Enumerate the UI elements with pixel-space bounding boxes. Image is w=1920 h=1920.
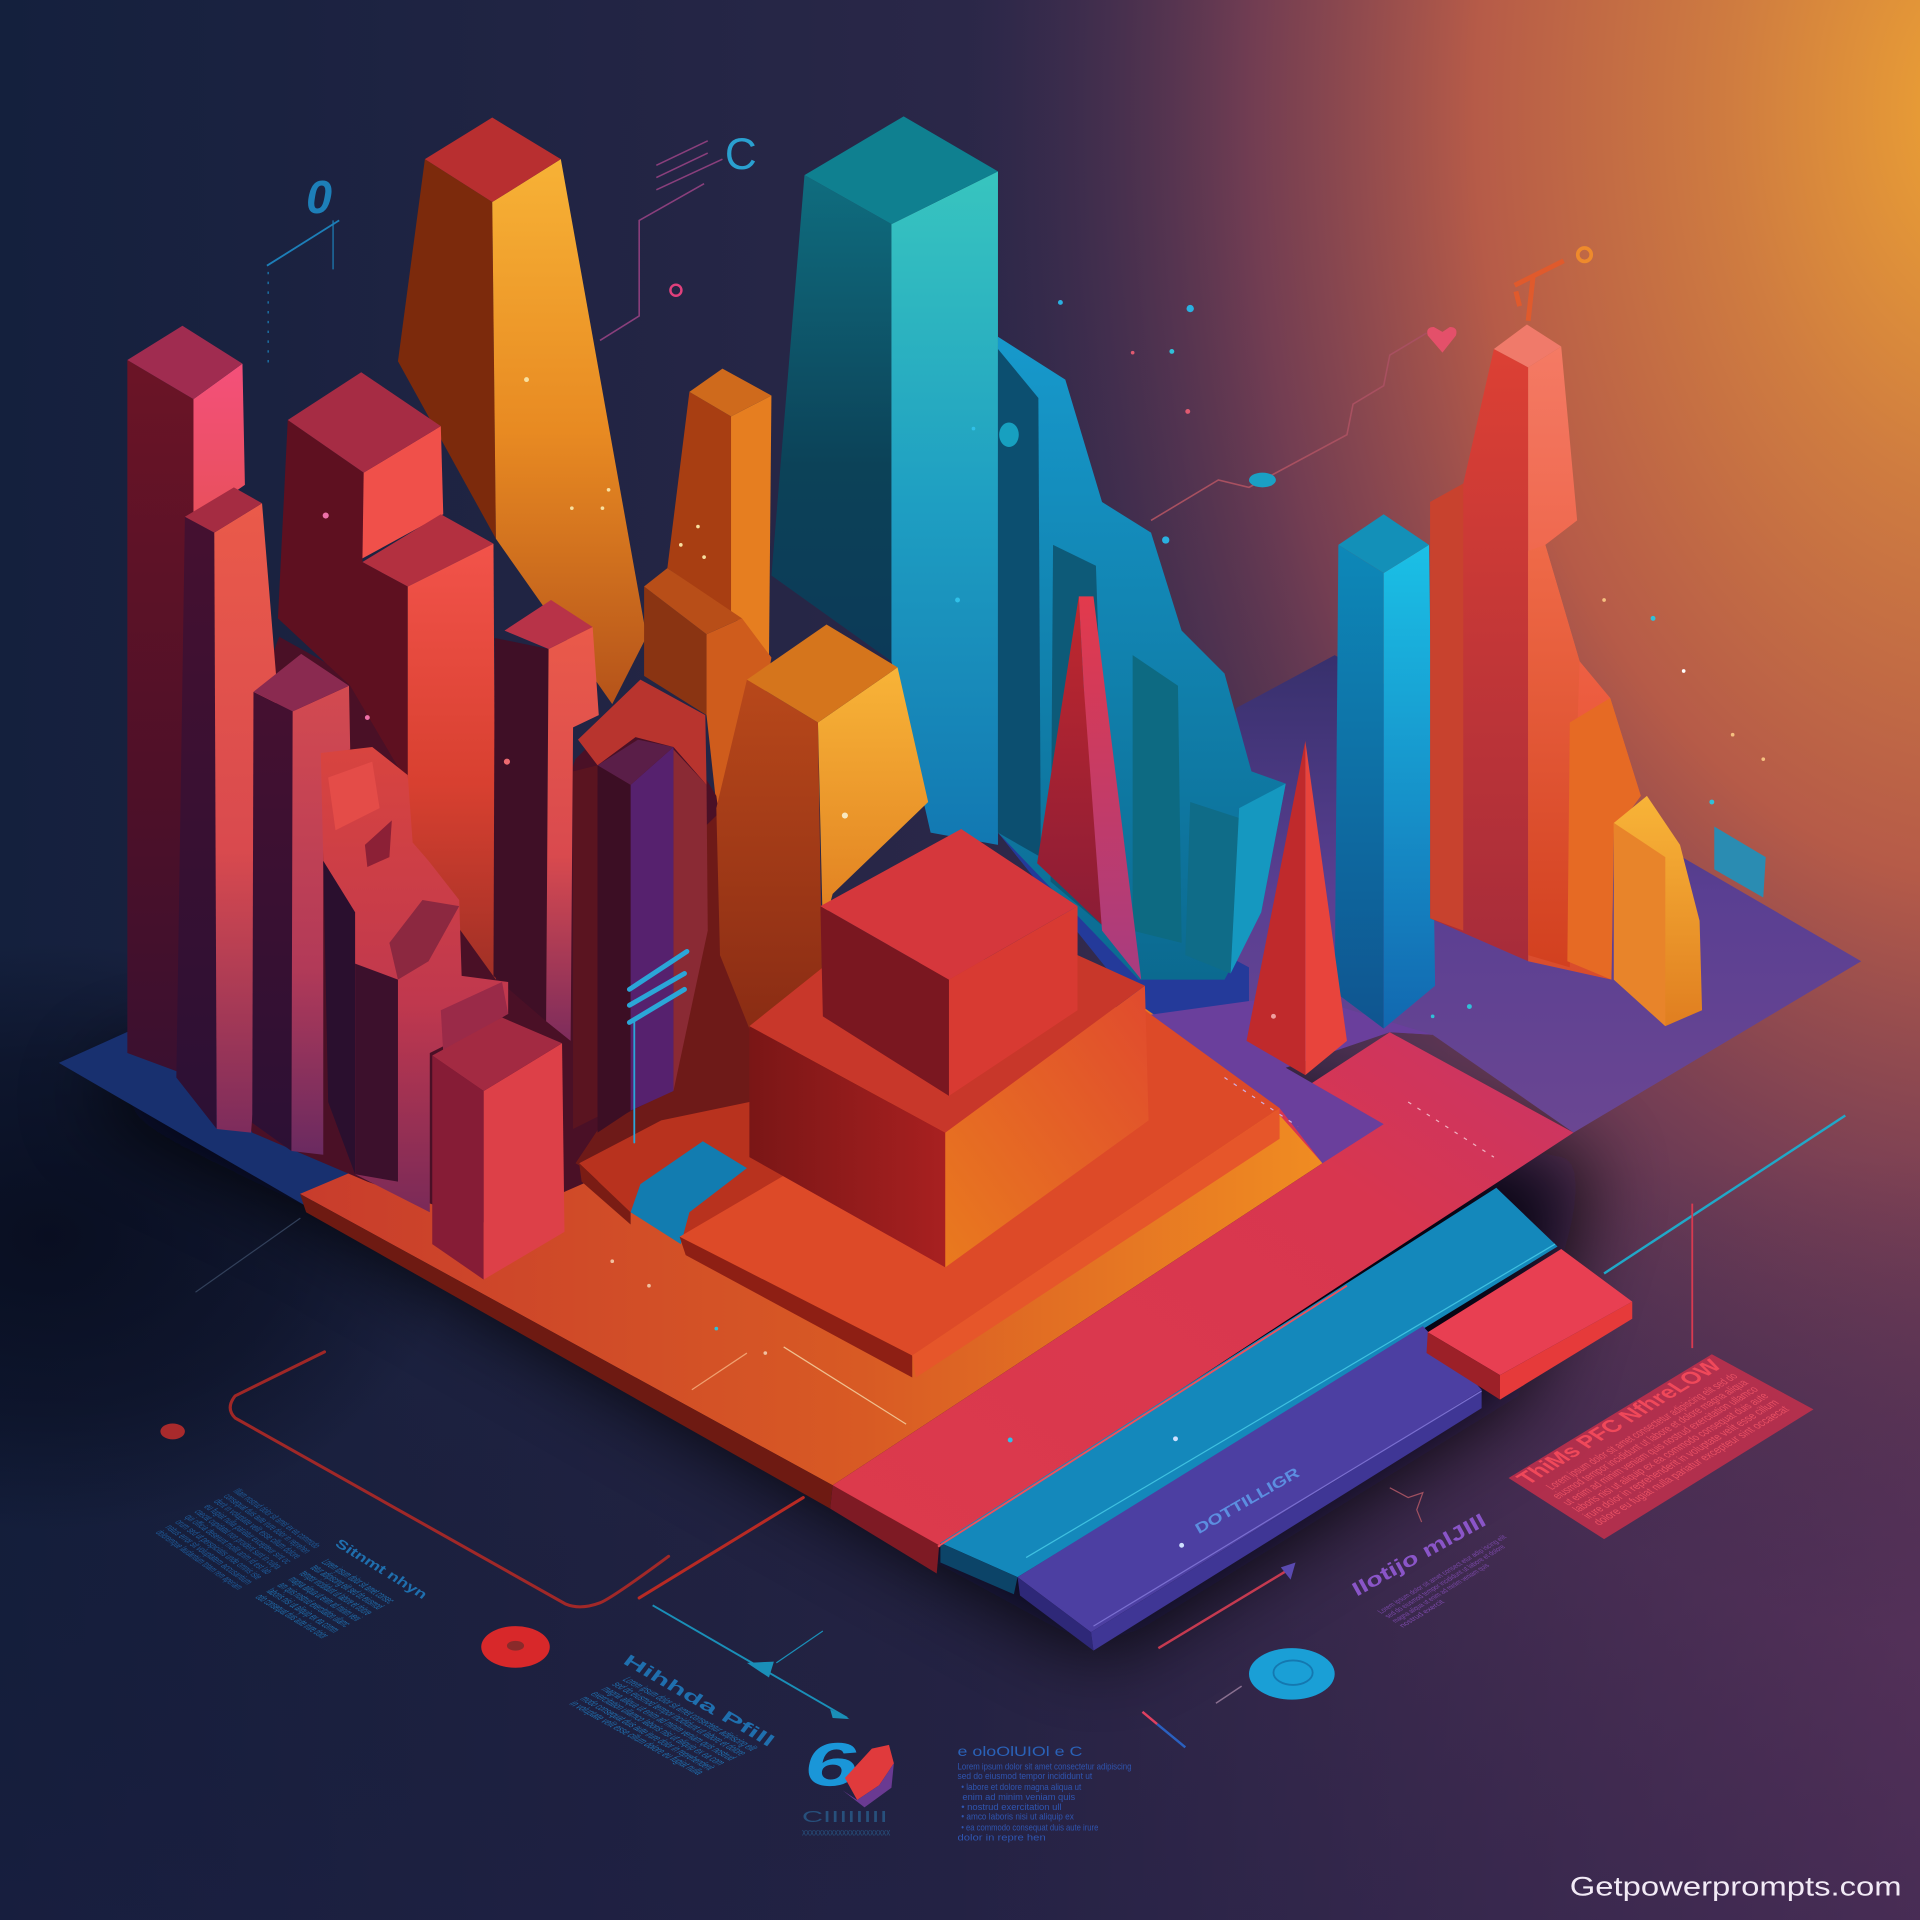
text panel: red: dolore eu fugiat nulla pariatur excepteur sint occaecat xyxy=(1590,1404,1793,1527)
text block: lower left two: Lorem ipsum dolor sit amet consec xyxy=(318,1557,398,1605)
floor: deep blue patch xyxy=(998,833,1249,1043)
text block: lower left one: derit in voluptate velit esse cillum dolore xyxy=(211,1498,304,1560)
wide red tower upper xyxy=(278,372,496,980)
cone pink xyxy=(1037,596,1141,980)
band: blue xyxy=(940,1188,1558,1594)
small orange tower xyxy=(644,369,771,804)
lower plinth red xyxy=(579,1102,857,1237)
purple tower xyxy=(573,680,708,1133)
backdrop mass of dark crimson behind left towers xyxy=(196,637,749,1224)
cone red xyxy=(1247,741,1347,1075)
logo icon: CIIIIIIII xyxy=(802,1809,888,1826)
text: odo consequat duis aute irure dolor xyxy=(252,1593,332,1640)
text list: bullets: • ea commodo consequat duis aute irure xyxy=(961,1823,1098,1833)
annotation: heart with line xyxy=(999,327,1456,520)
text panel: red xyxy=(1509,1354,1813,1539)
top cube xyxy=(820,829,1078,1096)
text panel: red: Lorem ipsum dolor sit amet consectetur adipiscing elit sed do xyxy=(1543,1371,1741,1492)
annotation: circuit lines and letter C: C xyxy=(725,130,757,179)
text block: lower left one xyxy=(152,1487,323,1592)
text list: bullets: e oloOlUIOl e C xyxy=(958,1744,1083,1759)
text block: lower left one: orum sed ut perspiciatis unde omnis iste xyxy=(172,1518,265,1581)
text list: bullets: sed do eiusmod tempor incididunt ut xyxy=(958,1771,1093,1781)
text block: lower left one: natus error sit voluptatem accusantium xyxy=(162,1523,255,1586)
text block: lower left one: qui officia deserunt mollit anim id est lab xyxy=(182,1513,274,1576)
logo icon: xxxxxxxxxxxxxxxxxxxxxx xyxy=(802,1828,890,1839)
stepped red pyramid chart xyxy=(680,829,1280,1378)
red arrow xyxy=(1158,1562,1296,1648)
orange central tower xyxy=(716,624,928,1029)
text panel: red: laboris nisi ut aliquip ex ea commodo consequat duis aute xyxy=(1569,1391,1772,1514)
stepped blue chart mass xyxy=(998,337,1286,980)
text block: centre bottom: Hihhda Pfill xyxy=(619,1652,778,1751)
text list: bullets: Lorem ipsum dolor sit amet consectetur adipiscing xyxy=(958,1761,1131,1771)
chart floor bands xyxy=(300,994,1573,1651)
floor: purple back panel xyxy=(1139,655,1861,1133)
text block: centre bottom: modo consequat duis aute irure dolor in reprehenderit xyxy=(576,1695,717,1772)
logo icon xyxy=(800,1731,894,1839)
tower at left centre xyxy=(252,654,350,1155)
text panel: red: ut enim ad minim veniam quis nostrud exercitation ullamco xyxy=(1559,1384,1762,1508)
blue column xyxy=(1335,514,1435,1029)
text list: bullets: • amco laboris nisi ut aliquip ex xyxy=(961,1812,1074,1822)
text block: purple: IIotijo mlJIII xyxy=(1348,1509,1490,1601)
logo icon: 6 xyxy=(800,1731,866,1799)
annotation: circuit lines and letter C xyxy=(600,130,757,340)
text block: centre bottom xyxy=(566,1652,778,1777)
text panel: red: irure dolor in reprehenderit in voluptate velit esse cillum xyxy=(1580,1397,1782,1521)
text on purple band: DOTTILLIGR xyxy=(1193,1465,1303,1538)
text block: centre bottom: magna aliqua ut enim ad minim veniam quis nostrud xyxy=(598,1686,738,1762)
text block: lower left one: doloremque laudantium totam rem aperiam xyxy=(152,1529,245,1592)
text block: lower left two: Sitnmt nhyn xyxy=(332,1537,430,1602)
watermark: Getpowerprompts.com xyxy=(1570,1872,1902,1902)
text list: bullets xyxy=(958,1744,1131,1842)
text block: centre bottom: Lorem ipsum dolor sit amet consectetur adipiscing elit xyxy=(619,1676,760,1753)
blue tag on plinth xyxy=(631,1141,747,1244)
middle step xyxy=(749,955,1149,1267)
callout frame: red rounded outline xyxy=(196,1218,803,1607)
band: pink red xyxy=(830,1032,1573,1573)
small arrow ticks xyxy=(1142,1686,1242,1747)
front crimson box xyxy=(432,1018,564,1280)
text panel: red: eiusmod tempor incididunt ut labore et dolore magna aliqua xyxy=(1549,1377,1751,1501)
backdrop rust wall xyxy=(576,784,784,1224)
text list: bullets: • labore et dolore magna aliqua ut xyxy=(961,1782,1082,1792)
particles xyxy=(323,300,1765,1548)
blue arrow xyxy=(653,1605,850,1719)
text block: lower left two: magna aliqua ut enim ad minim veni xyxy=(285,1575,365,1623)
red peak stepped chart xyxy=(1430,324,1702,1026)
text block: purple: nostrud exercit xyxy=(1397,1598,1447,1629)
text: Illiam nostrud dolor sit amet ex ea commodo xyxy=(230,1487,323,1550)
text block: purple: magna aliqua ut enim ad minim veniam quis xyxy=(1390,1562,1492,1624)
annotation: blue zero marker top left: 0 xyxy=(306,171,332,223)
lumpy crimson tower xyxy=(321,747,508,1212)
text list: bullets: dolor in repre hen xyxy=(958,1832,1046,1842)
band: magenta violet transition xyxy=(1139,994,1433,1163)
text list: bullets: enim ad minim veniam quis xyxy=(962,1792,1076,1802)
red tall tower xyxy=(176,487,277,1133)
base step xyxy=(680,1010,1280,1378)
blue circle icon xyxy=(1249,1648,1335,1700)
tower behind purple xyxy=(493,600,599,1041)
red target circle xyxy=(481,1626,550,1668)
text block: lower left two: am quis nostrud exercitation ullamc xyxy=(274,1581,354,1629)
text list: bullets: • nostrud exercitation ull xyxy=(961,1802,1062,1812)
red raised slab xyxy=(1427,1249,1632,1400)
annotation: blue zero marker top left xyxy=(267,171,339,367)
text block: purple xyxy=(1348,1509,1531,1629)
band: orange xyxy=(300,1004,1322,1509)
text block: lower left one: consequat duis aute irure dolor in reprehen xyxy=(220,1492,313,1555)
text block: purple: sed do eiusmod tempor incididunt ut labore et dolore xyxy=(1383,1543,1508,1620)
text panel: red: ThiMs PFC NfhreLOW xyxy=(1511,1356,1727,1488)
text block: lower left two: laboris nisi ut aliquip ex ea comm xyxy=(263,1587,343,1635)
band: purple xyxy=(1018,1326,1482,1651)
cyan and red leader lines xyxy=(1390,1116,1845,1522)
annotation: red marker atop peak xyxy=(1515,248,1591,321)
text block: lower left one: eu fugiat nulla pariatur excepteur sint oc xyxy=(201,1503,294,1566)
pink tower xyxy=(127,326,245,1078)
text block: lower left two xyxy=(252,1537,430,1640)
text block: centre bottom: sed do eiusmod tempor incididunt ut labore et dolore xyxy=(608,1681,749,1757)
blue flag panel xyxy=(1714,827,1766,898)
red dot xyxy=(160,1423,185,1439)
text block: purple: Lorem ipsum dolor sit amet consect etur adip iscing elit xyxy=(1375,1533,1509,1615)
text block: centre bottom: exercitation ullamco laboris nisi ut aliquip ex ea com xyxy=(587,1690,728,1767)
text block: lower left two: tetur adipiscing elit sed do eiusmod xyxy=(307,1563,387,1611)
blue pole with stripes xyxy=(629,951,687,1142)
tall orange tower xyxy=(398,118,647,704)
tall teal tower xyxy=(771,116,998,845)
floor: navy back strip xyxy=(59,1029,367,1206)
text block: centre bottom: in voluptate velit esse cillum dolore eu fugiat nulla xyxy=(566,1700,707,1777)
text block: lower left two: tempor incididunt ut labore et dolore xyxy=(296,1569,376,1617)
text block: lower left one: caecat cupidatat non proident sunt in culpa xyxy=(191,1508,284,1571)
